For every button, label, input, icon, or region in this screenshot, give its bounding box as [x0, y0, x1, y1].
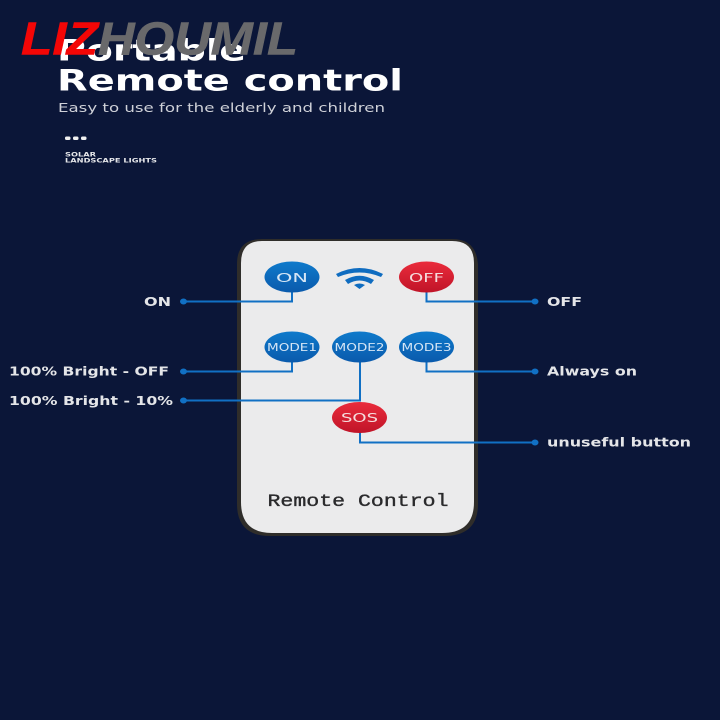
button: ON: ON — [276, 270, 308, 285]
left labels: 100% Bright - OFF — [9, 364, 169, 378]
button: ON — [264, 262, 320, 292]
button: SOS: SOS — [341, 410, 378, 425]
connector end dots — [180, 298, 538, 446]
button: OFF: OFF — [409, 270, 444, 285]
watermark logo — [21, 12, 298, 64]
right labels — [547, 295, 691, 450]
left labels: 100% Bright - 10% — [9, 394, 173, 408]
heading: Portable Remote control: Portable — [57, 34, 246, 68]
remote label: Remote Control — [268, 492, 448, 512]
left labels: ON — [144, 295, 171, 309]
button: MODE1: MODE1 — [267, 342, 317, 354]
brand label: solar landscape lights — [65, 152, 157, 164]
button: MODE1 — [264, 332, 320, 362]
icon: three dots — [65, 136, 86, 140]
brand label: solar landscape lights: LANDSCAPE LIGHTS — [65, 158, 157, 164]
heading: Portable Remote control — [57, 34, 403, 98]
button: MODE2: MODE2 — [334, 342, 384, 354]
left labels — [9, 295, 173, 408]
button: SOS — [332, 402, 387, 433]
right labels: Always on — [547, 364, 637, 378]
button: OFF — [399, 262, 454, 292]
connector lines — [183, 290, 535, 442]
icon: wireless signal — [336, 268, 383, 289]
right labels: unuseful button — [547, 436, 691, 450]
subtitle: Easy to use for the elderly and children — [58, 100, 385, 115]
button: MODE3 — [399, 332, 454, 362]
remote control body — [237, 239, 478, 536]
button: MODE2 — [332, 332, 387, 362]
right labels: OFF — [547, 295, 582, 309]
watermark logo: HOUMIL — [98, 12, 298, 64]
brand label: solar landscape lights: SOLAR — [65, 152, 97, 158]
heading: Portable Remote control: Remote control — [57, 64, 403, 98]
button: MODE3: MODE3 — [402, 342, 452, 354]
watermark logo: LIZ — [21, 12, 100, 64]
